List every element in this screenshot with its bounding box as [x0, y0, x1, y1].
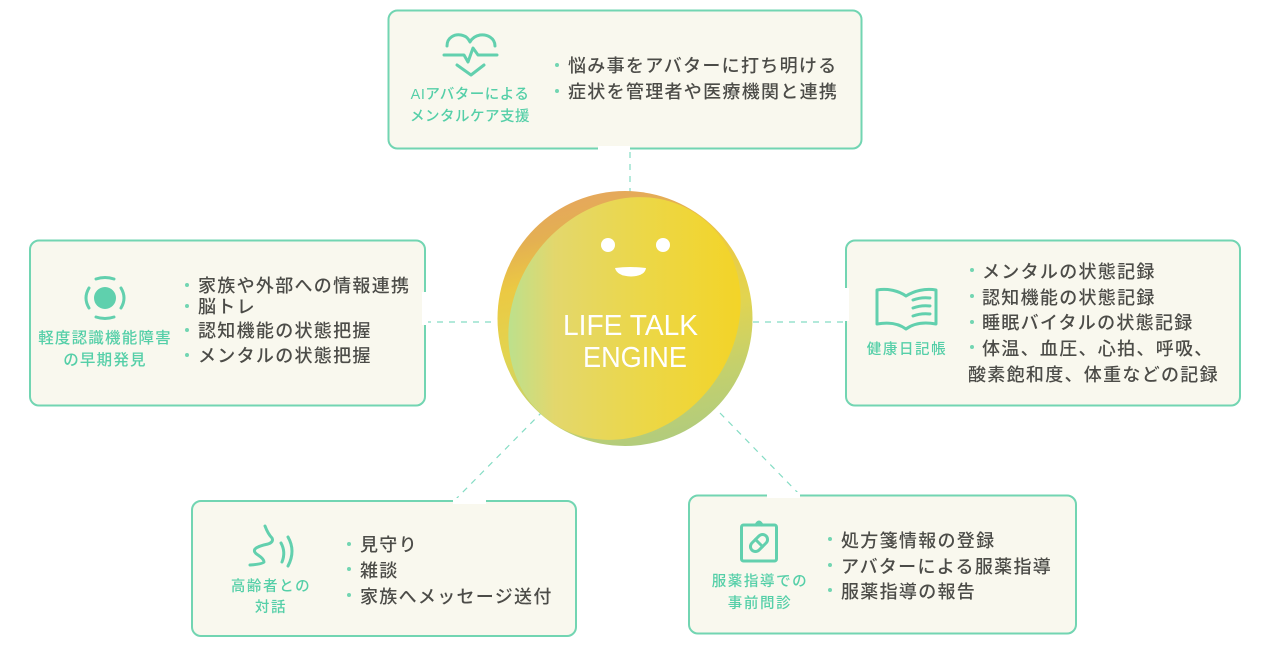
label: AIアバターによる	[411, 86, 529, 103]
face	[601, 238, 670, 276]
bullet list: 睡眠バイタルの状態記録	[982, 313, 1194, 333]
panel: conversation with seniors	[192, 498, 576, 636]
icon: target circle	[86, 278, 124, 318]
bullet list: メンタルの状態把握	[198, 346, 372, 366]
label: 対話	[255, 599, 287, 616]
label: メンタルケア支援	[410, 108, 530, 125]
panel: health diary	[843, 240, 1240, 406]
connector lines	[425, 152, 845, 500]
bullet list: 認知機能の状態把握	[198, 321, 372, 341]
bullet list: 悩み事をアバターに打ち明ける	[568, 56, 837, 76]
label: の早期発見	[63, 351, 147, 369]
bullet list: 症状を管理者や医療機関と連携	[568, 82, 838, 102]
label: 軽度認識機能障害	[38, 329, 172, 347]
bullet list: 酸素飽和度、体重などの記録	[968, 365, 1219, 385]
label	[38, 329, 172, 369]
bullet list: 認知機能の状態記録	[982, 288, 1156, 308]
center title: ENGINE	[583, 342, 687, 374]
bullet list: 体温、血圧、心拍、呼吸、	[982, 339, 1214, 359]
bullet list: 雑談	[360, 561, 399, 581]
bullet list: 服薬指導の報告	[841, 582, 976, 602]
bullet list: 処方箋情報の登録	[841, 531, 995, 551]
circle back shape	[498, 191, 752, 446]
panel: medication guidance pre-consultation	[689, 492, 1076, 634]
label: 健康日記帳	[867, 341, 947, 358]
center title	[563, 310, 698, 374]
bullet list	[347, 535, 553, 607]
bullet list: 家族や外部への情報連携	[198, 276, 410, 296]
bullet list	[555, 56, 838, 102]
circle front shape	[508, 197, 741, 440]
icon: speaking face	[250, 526, 292, 566]
icon: clipboard with pill	[742, 522, 776, 561]
bullet list: 見守り	[360, 535, 418, 555]
center title: LIFE TALK	[563, 310, 698, 342]
bullet list: メンタルの状態記録	[982, 262, 1156, 282]
panel: MCI early detection	[30, 240, 428, 406]
bullet list: アバターによる服薬指導	[841, 557, 1052, 577]
label	[712, 572, 808, 612]
icon: heart with pulse	[444, 35, 497, 75]
label	[410, 86, 530, 125]
label: 高齢者との	[231, 578, 311, 595]
bullet list: 家族へメッセージ送付	[360, 587, 553, 607]
icon: open book	[877, 289, 936, 329]
label	[231, 578, 311, 616]
bullet list	[968, 262, 1219, 385]
label: 服薬指導での	[712, 572, 808, 590]
bullet list: 脳トレ	[198, 297, 256, 317]
center character circle	[490, 185, 760, 450]
panel: AI avatar mental care	[388, 10, 862, 151]
bullet list	[185, 276, 410, 366]
bullet list	[828, 531, 1052, 602]
label: 事前問診	[728, 595, 792, 612]
